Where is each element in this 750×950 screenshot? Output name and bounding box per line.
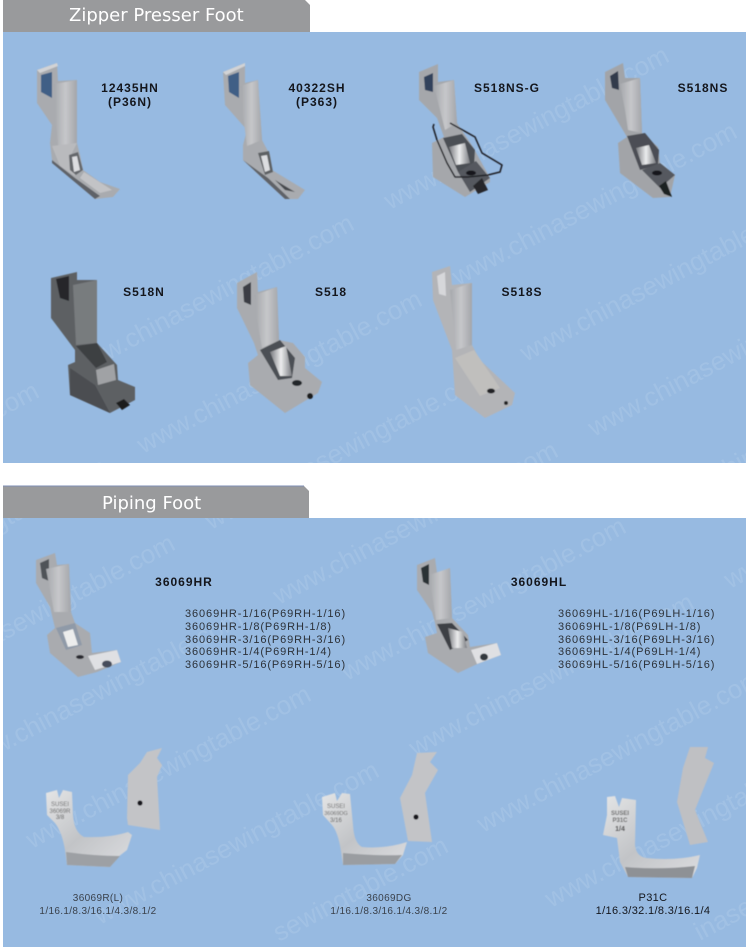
label: 12435HN (P36N)	[101, 81, 159, 109]
caption: 36069DG: 1/16.1/8.3/16.1/4.3/8.1/2	[330, 906, 448, 917]
label: S518NS: S518NS	[678, 81, 728, 95]
watermark pattern: www.chinasewingtable.com	[63, 208, 359, 384]
icon: piping foot 36069HR	[36, 553, 121, 677]
icon: piping foot 36069HL	[417, 558, 501, 673]
label: S518S: S518S	[501, 285, 543, 299]
watermark pattern: sewingtable.com	[268, 830, 453, 947]
list: 36069HL sizes: 36069HL-3/16(P69LH-3/16)	[558, 634, 715, 646]
icon: presser foot S518	[237, 272, 322, 413]
icon: hinged foot P31C: P31C	[612, 818, 628, 824]
icon: hinged foot P31C: 1/4	[615, 826, 625, 833]
list: 36069HL sizes: 36069HL-1/4(P69LH-1/4)	[558, 646, 701, 658]
label: 12435HN (P36N): 12435HN	[101, 81, 159, 95]
heading tab: Zipper Presser Foot	[3, 0, 310, 32]
caption: 36069R(L): 1/16.1/8.3/16.1/4.3/8.1/2	[39, 906, 157, 917]
panel: piping foot background	[3, 518, 746, 947]
icon: hinged foot 36069R(L): 3/8	[56, 815, 65, 821]
icon: presser foot S518NS	[605, 63, 675, 198]
caption: 36069R(L)	[39, 893, 157, 917]
list: 36069HL sizes: 36069HL-5/16(P69LH-5/16)	[558, 659, 715, 671]
watermark pattern: www.chinasewingtable.com	[88, 755, 384, 931]
icon: presser foot S518N dark	[51, 272, 135, 413]
icon: hinged foot 36069R(L): 36069R	[49, 809, 71, 815]
caption: P31C	[596, 892, 710, 917]
list: 36069HR sizes: 36069HR-1/4(P69RH-1/4)	[185, 646, 332, 658]
list: 36069HL sizes: 36069HL-1/16(P69LH-1/16)	[558, 608, 715, 620]
icon: hinged foot P31C	[603, 747, 714, 878]
list: 36069HR sizes: 36069HR-1/8(P69RH-1/8)	[185, 621, 332, 633]
icon: presser foot S518NS-G with guard	[419, 64, 502, 197]
icon: presser foot S518S	[432, 266, 515, 418]
heading tab: Piping Foot: Piping Foot	[102, 493, 201, 514]
watermark pattern: www.chinasewingtable.com	[199, 360, 495, 536]
label: 36069HL: 36069HL	[511, 575, 567, 589]
label: 40322SH (P363): 40322SH	[288, 81, 346, 95]
label: 12435HN (P36N): (P36N)	[108, 95, 152, 109]
watermark pattern: www.chinasewingtable.com	[131, 284, 427, 460]
watermark pattern: www.chinasewingtable.com	[378, 40, 674, 216]
label: 40322SH (P363): (P363)	[296, 95, 338, 109]
icon: hinged foot 36069R(L)	[46, 748, 162, 867]
label: 36069HR: 36069HR	[155, 575, 213, 589]
watermark pattern: www.chinasewingtable.com	[446, 116, 742, 292]
heading tab: Zipper Presser Foot: Zipper Presser Foot	[69, 5, 244, 26]
panel: zipper presser foot background	[3, 32, 746, 463]
label: 40322SH (P363)	[288, 81, 346, 109]
list: 36069HR sizes: 36069HR-3/16(P69RH-3/16)	[185, 634, 346, 646]
list: 36069HR sizes	[185, 608, 346, 671]
icon: hinged foot 36069R(L): SUSEI	[51, 802, 69, 808]
watermark pattern: www.chinasewingtable.com	[267, 435, 563, 611]
watermark pattern: www.chinasewingtable.com	[20, 679, 316, 855]
icon: hinged foot P31C: SUSEI	[611, 811, 629, 817]
icon: hinged foot 36069DG: SUSEI	[327, 804, 345, 810]
label: S518NS-G: S518NS-G	[474, 81, 540, 95]
icon: presser foot 40322SH	[223, 63, 305, 199]
heading tab: Piping Foot	[3, 486, 309, 518]
list: 36069HL sizes: 36069HL-1/8(P69LH-1/8)	[558, 621, 701, 633]
caption: P31C: P31C	[639, 892, 667, 904]
icon: hinged foot 36069DG	[322, 752, 438, 865]
icon: hinged foot 36069DG: 36069DG	[324, 811, 348, 817]
caption: 36069DG: 36069DG	[366, 893, 412, 904]
list: 36069HR sizes: 36069HR-5/16(P69RH-5/16)	[185, 659, 346, 671]
watermark pattern: www.chinasewingtable.com	[335, 511, 631, 687]
icon: presser foot 12435HN	[37, 63, 120, 199]
caption: 36069R(L): 36069R(L)	[73, 893, 123, 904]
list: 36069HR sizes: 36069HR-1/16(P69RH-1/16)	[185, 608, 346, 620]
caption: 36069DG	[330, 893, 448, 917]
label: S518: S518	[315, 285, 347, 299]
list: 36069HL sizes	[558, 608, 715, 671]
watermark pattern: www.chinasewingtable.com	[403, 587, 699, 763]
icon: hinged foot 36069DG: 3/16	[330, 818, 342, 824]
caption: P31C: 1/16.3/32.1/8.3/16.1/4	[596, 905, 710, 917]
label: S518N: S518N	[123, 285, 165, 299]
